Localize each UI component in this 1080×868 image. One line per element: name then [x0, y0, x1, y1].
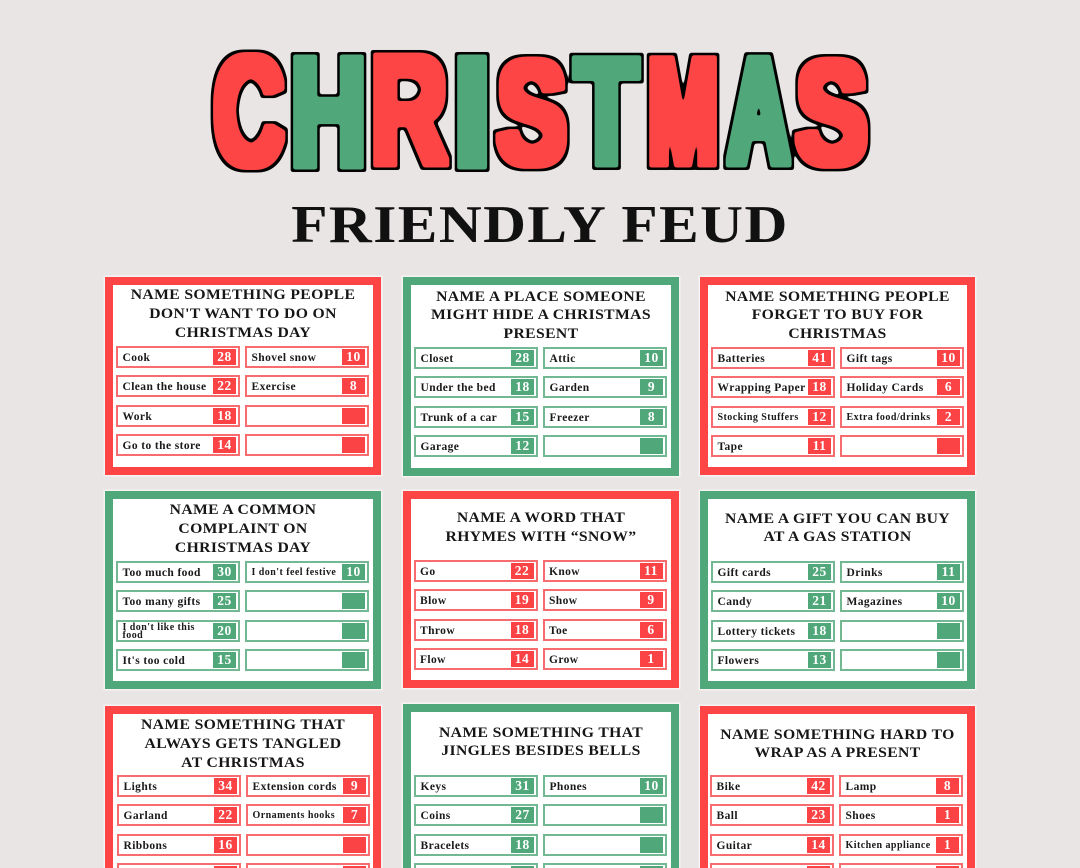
question heading: NAME SOMETHING THAT: [439, 724, 643, 740]
title: CHRISTMAS: C: [214, 26, 284, 198]
answer: Ball: [710, 804, 834, 826]
answer: blank: [543, 834, 667, 856]
answer: Keys: [414, 775, 538, 797]
answer: Extra food/drinks: [840, 406, 964, 428]
answer: Go: 22: [515, 563, 529, 578]
answer: Under the bed: Under the bed: [420, 382, 496, 394]
question heading: JINGLES BESIDES BELLS: [441, 743, 641, 759]
question heading: COMPLAINT ON: [178, 521, 308, 537]
question heading: [725, 510, 950, 545]
answer: I don't feel festive: [245, 561, 369, 583]
answer: Show: Show: [549, 595, 577, 607]
answer: Keys: 31: [515, 778, 530, 793]
answer: Gift tags: [840, 347, 964, 369]
answer: Wrapping Paper: 18: [812, 379, 827, 394]
answer: Toe: [542, 619, 666, 641]
answer: Holiday Cards: 6: [945, 379, 952, 394]
answer: Lamp: 8: [944, 778, 951, 793]
answer: Too many gifts: 25: [217, 593, 232, 608]
answer: Go: [414, 560, 538, 582]
title: CHRISTMAS: S: [497, 31, 567, 194]
answer: Flow: Flow: [420, 654, 446, 666]
question heading: PRESENT: [504, 326, 578, 342]
question heading: MIGHT HIDE A CHRISTMAS: [431, 307, 651, 323]
question heading: NAME SOMETHING PEOPLE: [131, 287, 355, 303]
answer: I don't feel festive: I don't feel festive: [252, 567, 336, 578]
question heading: [431, 288, 651, 342]
answer: Tape: [711, 435, 835, 457]
answer: Shoes: Shoes: [846, 810, 876, 822]
title: CHRISTMAS: M: [648, 27, 718, 195]
question heading: NAME A GIFT YOU CAN BUY: [725, 510, 950, 526]
question heading: NAME A PLACE SOMEONE: [436, 288, 646, 304]
answer: Kitchen appliance: 1: [944, 837, 951, 852]
answer: Freezer: [543, 406, 667, 428]
answer: I don't like this food: [116, 620, 240, 642]
answer: Candy: [711, 590, 835, 612]
question heading: WRAP AS A PRESENT: [754, 745, 921, 761]
answer: Trunk of a car: [414, 406, 538, 428]
answer: Under the bed: [414, 376, 538, 398]
answers grid: [711, 347, 964, 457]
question heading: RHYMES WITH “SNOW”: [446, 529, 636, 545]
answers grid: [116, 346, 369, 456]
answer: Closet: [414, 347, 538, 369]
answer: Magazines: [840, 590, 964, 612]
answer: Bike: 42: [811, 778, 826, 793]
answer: Extension cords: [246, 775, 370, 797]
title: CHRISTMAS: [214, 24, 868, 198]
answer: blank: [543, 863, 667, 868]
answer: Tape: 11: [813, 438, 826, 453]
answer: Flowers: [711, 649, 835, 671]
title: CHRISTMAS: H: [291, 26, 366, 198]
answer: Ornaments hooks: Ornaments hooks: [252, 810, 335, 821]
answer: Ornaments hooks: 7: [351, 807, 358, 822]
answer: Know: 11: [644, 563, 658, 578]
answer: Gift tags: 10: [941, 350, 956, 365]
answer: Guitar: Guitar: [716, 840, 752, 852]
answer: Exercise: [245, 375, 369, 397]
answer: Bracelets: 18: [515, 837, 530, 852]
answer: I don't like this food: I don't like this: [122, 622, 195, 633]
answer: Shovel snow: 10: [346, 349, 361, 364]
answer: Coins: Coins: [420, 810, 451, 822]
question heading: NAME A WORD THAT: [457, 510, 625, 526]
answer: Candy: Candy: [718, 596, 752, 608]
answer: Holiday Cards: Holiday Cards: [846, 382, 924, 394]
answers grid: [117, 775, 370, 868]
answer: blank: [840, 620, 964, 642]
answer: Garage: 12: [515, 438, 530, 453]
answer: It's too cold: 15: [217, 652, 232, 667]
answer: Extra food/drinks: Extra food/drinks: [846, 412, 931, 423]
answer: Keys: Keys: [420, 781, 446, 793]
answer: Bracelets: [414, 834, 538, 856]
answer: Wrapping Paper: Wrapping Paper: [718, 382, 806, 394]
question heading: NAME SOMETHING HARD TO: [720, 726, 955, 742]
answer: Freezer: 8: [648, 409, 655, 424]
title: CHRISTMAS: T: [575, 29, 638, 196]
answer: Extra food/drinks: 2: [945, 409, 952, 424]
answer: It's too cold: [116, 649, 240, 671]
answer: Garden: Garden: [550, 382, 590, 394]
answer: Too much food: Too much food: [122, 567, 201, 579]
answer: blank: [245, 590, 369, 612]
answer: Batteries: Batteries: [718, 353, 765, 365]
question heading: AT A GAS STATION: [763, 529, 912, 545]
answer: Go to the store: 14: [217, 437, 232, 452]
answer: I don't like this food: 20: [217, 623, 232, 638]
answer: blank: [245, 434, 369, 456]
answer: Clean the house: [116, 375, 240, 397]
answer: Trunk of a car: Trunk of a car: [420, 412, 497, 424]
panel: common complaint: [105, 491, 381, 689]
answer: Toe: 6: [647, 622, 655, 637]
answer: Go: Go: [420, 566, 436, 578]
answer: Go to the store: [116, 434, 240, 456]
answer: Extension cords: Extension cords: [252, 781, 337, 793]
answer: Throw: [414, 619, 538, 641]
answer: Attic: Attic: [550, 353, 576, 365]
answer: Show: [542, 589, 666, 611]
answer: Coins: 27: [515, 807, 530, 822]
answer: Coins: [414, 804, 538, 826]
answer: Show: 9: [647, 592, 655, 607]
answer: It's too cold: It's too cold: [122, 655, 185, 667]
question heading: [725, 288, 950, 342]
answer: Shovel snow: Shovel snow: [252, 352, 316, 364]
answer: Blow: 19: [515, 592, 529, 607]
header: title artwork: [210, 24, 871, 254]
answer: cut off: [117, 863, 241, 868]
answer: Kitchen appliance: Kitchen appliance: [846, 840, 931, 851]
answer: Ornaments hooks: [246, 804, 370, 826]
answers grid: [710, 775, 963, 868]
answer: blank: [245, 649, 369, 671]
answer: Lights: [117, 775, 241, 797]
answer: I don't feel festive: 10: [346, 564, 361, 579]
answer: Guitar: 14: [811, 837, 826, 852]
answer: cut off: [414, 863, 538, 868]
answer: Lottery tickets: Lottery tickets: [718, 626, 795, 638]
answer: Flowers: 13: [812, 652, 827, 667]
answer: Exercise: 8: [350, 378, 357, 393]
answer: Garage: [414, 435, 538, 457]
answer: Phones: Phones: [550, 781, 587, 793]
answer: Too much food: [116, 561, 240, 583]
panel: rhymes with snow: [403, 491, 679, 688]
answer: Too much food: 30: [217, 564, 232, 579]
answer: Shoes: 1: [944, 807, 951, 822]
answer: Cook: Cook: [122, 352, 150, 364]
answer: Too many gifts: [116, 590, 240, 612]
title: CHRISTMAS: A: [728, 26, 789, 195]
answer: Garage: Garage: [420, 441, 459, 453]
answer: Bike: Bike: [716, 781, 740, 793]
answer: Grow: Grow: [549, 654, 578, 666]
answer: Stocking Stuffers: Stocking Stuffers: [718, 412, 799, 423]
question heading: [141, 717, 345, 771]
answer: Garland: 22: [218, 807, 233, 822]
question heading: NAME SOMETHING THAT: [141, 717, 345, 733]
answer: Lamp: Lamp: [846, 781, 876, 793]
answer: blank: [543, 435, 667, 457]
answer: Exercise: Exercise: [252, 381, 296, 393]
answer: Magazines: Magazines: [846, 596, 902, 608]
answer: Gift cards: Gift cards: [718, 567, 771, 579]
question heading: AT CHRISTMAS: [181, 755, 305, 771]
answer: Clean the house: Clean the house: [122, 381, 206, 393]
answer: cut off: [839, 863, 963, 868]
panel: things people don't want to do: [105, 277, 381, 475]
answer: I don't like this food: food: [122, 630, 143, 641]
answer: Gift tags: Gift tags: [846, 353, 893, 365]
answer: Ball: 23: [811, 807, 826, 822]
answer: Throw: 18: [515, 622, 529, 637]
answer: Lamp: [839, 775, 963, 797]
answer: Shovel snow: [245, 346, 369, 368]
answer: cut off: [710, 863, 834, 868]
answer: Phones: 10: [644, 778, 659, 793]
answer: Attic: 10: [644, 350, 659, 365]
answer: Phones: [543, 775, 667, 797]
answer: blank: [245, 405, 369, 427]
question heading: CHRISTMAS DAY: [175, 325, 311, 341]
answer: Under the bed: 18: [515, 379, 530, 394]
answer: Too many gifts: Too many gifts: [122, 596, 201, 608]
answer: Work: 18: [217, 408, 232, 423]
answer: Ribbons: [117, 834, 241, 856]
answer: Guitar: [710, 834, 834, 856]
answer: Freezer: Freezer: [550, 412, 590, 424]
question heading: [170, 502, 316, 556]
answer: Throw: Throw: [420, 625, 455, 637]
answer: Flow: [414, 648, 538, 670]
answer: Work: Work: [122, 411, 152, 423]
answer: Garden: 9: [648, 379, 655, 394]
answer: Drinks: 11: [942, 564, 955, 579]
answer: Gift cards: [711, 561, 835, 583]
answer: Stocking Stuffers: 12: [812, 409, 827, 424]
title: CHRISTMAS: S: [796, 32, 868, 195]
title: CHRISTMAS: R: [371, 24, 447, 197]
answers grid: [414, 775, 667, 868]
answer: Flowers: Flowers: [718, 655, 759, 667]
answer: Blow: [414, 589, 538, 611]
answer: Bike: [710, 775, 834, 797]
question heading: CHRISTMAS: [788, 326, 887, 342]
answer: Ribbons: Ribbons: [124, 840, 167, 852]
answer: Tape: Tape: [718, 441, 743, 453]
question heading: CHRISTMAS DAY: [175, 540, 311, 556]
answer: Know: [542, 560, 666, 582]
answer: Blow: Blow: [420, 595, 447, 607]
answer: Grow: [542, 648, 666, 670]
answer: Shoes: [839, 804, 963, 826]
answer: Batteries: [711, 347, 835, 369]
answer: Garland: [117, 804, 241, 826]
answer: Lights: 34: [218, 778, 233, 793]
question heading: [131, 287, 355, 341]
question heading: [439, 724, 643, 759]
answer: Cook: 28: [217, 349, 232, 364]
panel: gets tangled: [105, 706, 381, 868]
answers grid: [414, 347, 667, 457]
title: CHRISTMAS: I: [452, 26, 492, 198]
answer: blank: [840, 649, 964, 671]
answer: Batteries: 41: [812, 350, 827, 365]
answer: Attic: [543, 347, 667, 369]
answer: Magazines: 10: [941, 593, 956, 608]
answer: Toe: Toe: [549, 625, 568, 637]
answer: Cook: [116, 346, 240, 368]
answer: Candy: 21: [812, 593, 827, 608]
answer: Trunk of a car: 15: [515, 409, 530, 424]
panel: forget to buy: [700, 277, 975, 475]
answer: blank: [246, 834, 370, 856]
panel: jingles besides bells: [403, 704, 679, 868]
answer: Lights: Lights: [124, 781, 157, 793]
panel: gas station gift: [700, 491, 975, 689]
answers grid: [116, 561, 369, 671]
answer: Garland: Garland: [124, 810, 168, 822]
answer: Flow: 14: [515, 651, 529, 666]
answer: Ball: Ball: [716, 810, 738, 822]
panel: hard to wrap: [700, 706, 975, 868]
answer: Lottery tickets: [711, 620, 835, 642]
answer: Wrapping Paper: [711, 376, 835, 398]
answer: Drinks: [840, 561, 964, 583]
answer: Stocking Stuffers: [711, 406, 835, 428]
answer: Work: [116, 405, 240, 427]
subtitle: FRIENDLY FEUD: FRIENDLY FEUD: [291, 196, 789, 254]
answers grid: [414, 560, 667, 670]
answer: blank: [840, 435, 964, 457]
answer: Garden: [543, 376, 667, 398]
answer: Lottery tickets: 18: [812, 623, 827, 638]
answer: blank: [246, 863, 370, 868]
answer: blank: [245, 620, 369, 642]
answer: Know: Know: [549, 566, 580, 578]
answer: Extension cords: 9: [351, 778, 358, 793]
question heading: NAME SOMETHING PEOPLE: [725, 288, 950, 304]
answer: Closet: Closet: [420, 353, 454, 365]
answer: Drinks: Drinks: [846, 567, 883, 579]
question heading: ALWAYS GETS TANGLED: [145, 736, 341, 752]
question heading: NAME A COMMON: [170, 502, 316, 518]
answer: Bracelets: Bracelets: [420, 840, 469, 852]
answer: Ribbons: 16: [218, 837, 233, 852]
answer: Clean the house: 22: [217, 378, 232, 393]
answer: Go to the store: Go to the store: [122, 440, 201, 452]
answers grid: [711, 561, 964, 671]
question heading: FORGET TO BUY FOR: [752, 307, 923, 323]
question heading: [446, 510, 636, 545]
answer: Holiday Cards: [840, 376, 964, 398]
answer: Grow: 1: [647, 651, 655, 666]
question heading: DON'T WANT TO DO ON: [149, 306, 337, 322]
answer: Closet: 28: [515, 350, 530, 365]
question heading: [720, 726, 955, 761]
panel: hide a present: [403, 277, 679, 476]
answer: Gift cards: 25: [812, 564, 827, 579]
answer: blank: [543, 804, 667, 826]
answer: Kitchen appliance: [839, 834, 963, 856]
